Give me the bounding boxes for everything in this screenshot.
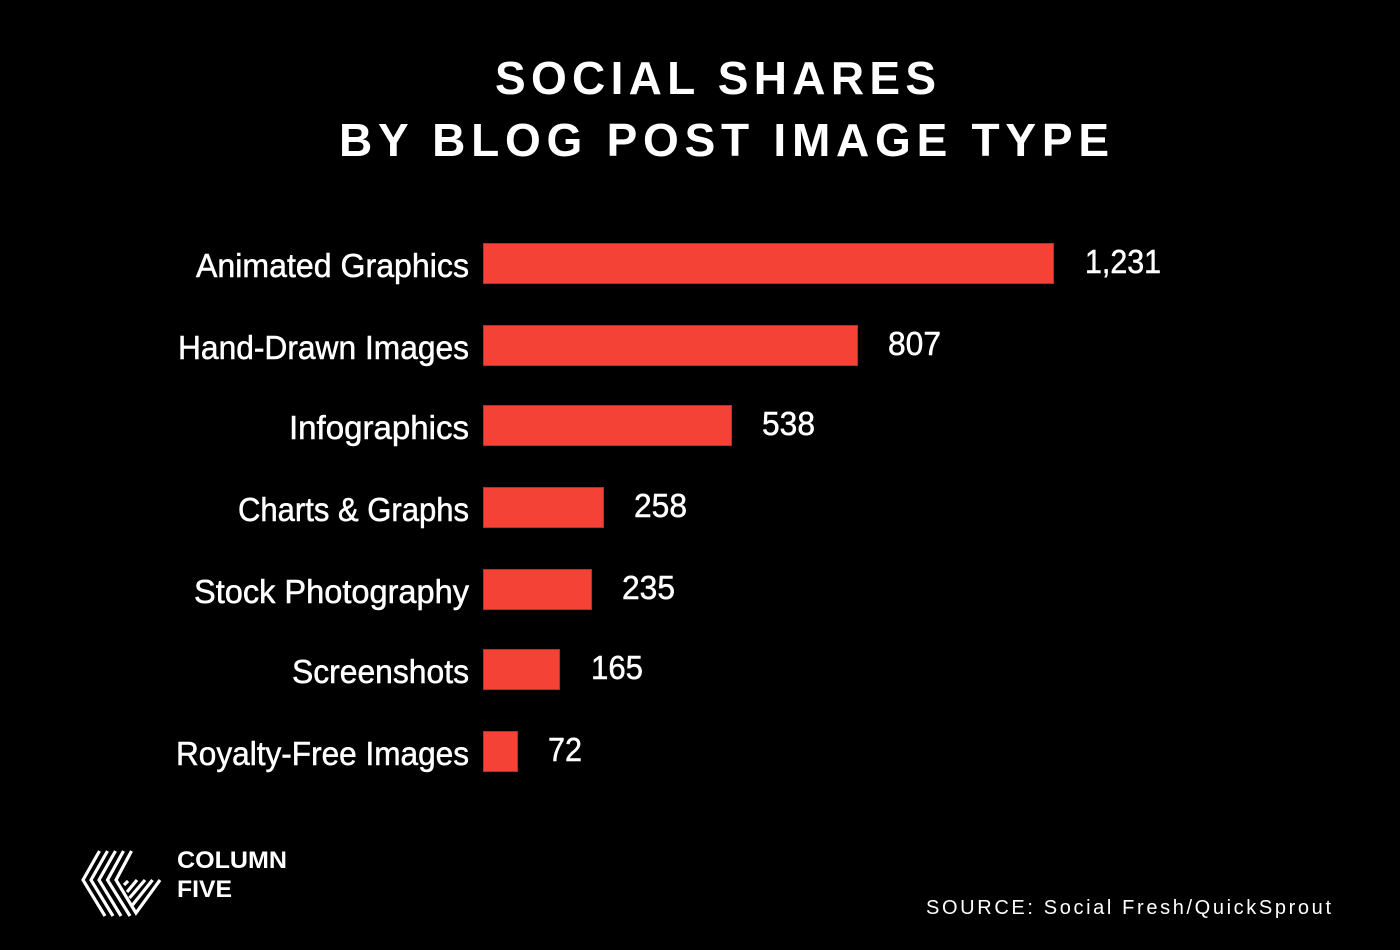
row: Stock Photography: 235 — [622, 569, 675, 606]
title: BY BLOG POST IMAGE TYPE — [339, 114, 1109, 166]
row: Screenshots: Screenshots — [292, 653, 469, 690]
row: Infographics: 538 — [762, 405, 815, 442]
source note: SOURCE: Social Fresh/QuickSprout — [926, 897, 1331, 919]
row: Screenshots — [292, 649, 643, 690]
row: Hand-Drawn Images — [178, 325, 941, 366]
row: Royalty-Free Images: Royalty-Free Images — [176, 735, 469, 772]
row: Stock Photography: Stock Photography — [194, 573, 469, 610]
logo wordmark: FIVE — [177, 876, 232, 903]
logo wordmark — [177, 847, 287, 903]
row: Charts & Graphs: Charts & Graphs — [238, 491, 469, 528]
row: Animated Graphics: 1,231 — [1085, 243, 1161, 280]
title — [339, 52, 1109, 166]
row: Infographics — [289, 405, 815, 446]
title: SOCIAL SHARES — [495, 52, 936, 104]
row: Royalty-Free Images: 72 — [548, 731, 582, 768]
row: Screenshots: 165 — [591, 649, 643, 686]
row: Infographics: Infographics — [289, 409, 469, 446]
row: Charts & Graphs: 258 — [634, 487, 687, 524]
row: Hand-Drawn Images: Hand-Drawn Images — [178, 329, 469, 366]
logo wordmark: COLUMN — [177, 847, 287, 874]
row: Hand-Drawn Images: 807 — [888, 325, 941, 362]
row: Stock Photography — [194, 569, 675, 610]
row: Animated Graphics: Animated Graphics — [196, 247, 469, 284]
row: Royalty-Free Images — [176, 731, 582, 772]
icon: Column Five logo mark — [83, 851, 160, 916]
row: Animated Graphics — [196, 243, 1161, 284]
bar chart — [176, 243, 1161, 772]
row: Charts & Graphs — [238, 487, 687, 528]
